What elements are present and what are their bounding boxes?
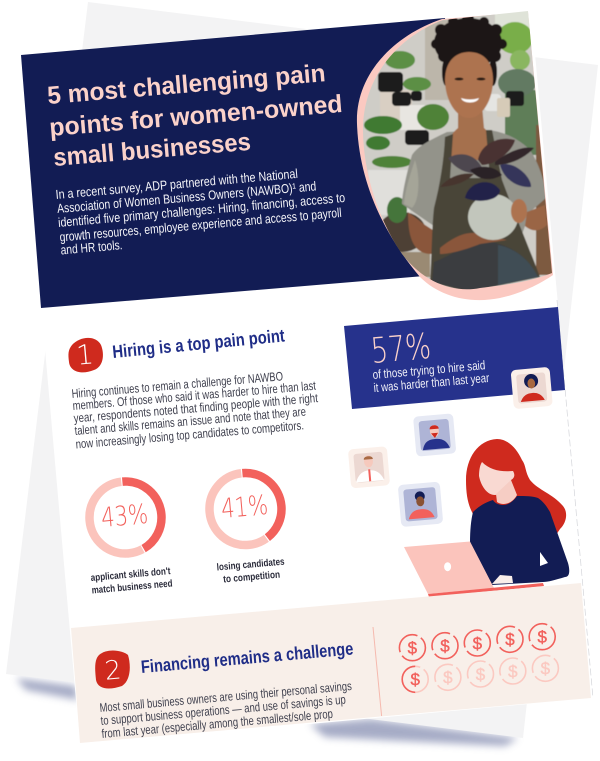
financing body text: Most small business owners are using their personal savings	[99, 679, 352, 715]
icon: dollar signs row 1: $	[473, 634, 483, 653]
photo hanging pots	[378, 72, 524, 145]
donut label 1: match business need	[91, 578, 173, 596]
title: 5 most challenging pain	[46, 59, 327, 110]
photo foliage	[364, 22, 536, 223]
woman hand	[492, 575, 513, 584]
panel: 57% stat box: 57%	[369, 327, 433, 372]
panel: 57% stat box: of those trying to hire said	[372, 358, 486, 382]
panel: section 2 number badge	[95, 650, 130, 688]
photo pot	[468, 194, 518, 240]
illustration: woman at laptop	[404, 439, 569, 597]
hiring body text: Hiring continues to remain a challenge for NAWBO	[71, 369, 284, 401]
laptop logo	[444, 562, 451, 571]
icon: dollar signs row 2: $	[508, 662, 518, 681]
sweater gap	[540, 552, 548, 566]
icon: dollar signs row 1	[408, 628, 547, 658]
woman sweater	[470, 496, 569, 585]
photo right hand	[511, 199, 527, 223]
panel: section 1 number badge	[68, 338, 103, 372]
intro text: Association of Women Business Owners (NAWBO)¹ and	[56, 178, 317, 216]
panel: 57% stat box: it was harder than last year	[373, 371, 490, 395]
photo leaves	[440, 139, 534, 201]
hiring body text: now increasingly losing top candidates to competitors.	[75, 418, 304, 451]
donut label 2: to competition	[223, 570, 281, 585]
photo hair	[431, 13, 507, 86]
heading: financing: Financing remains a challenge	[140, 638, 354, 677]
photo backdrop	[363, 14, 548, 288]
icon: dollar signs row 2: $	[410, 670, 420, 689]
panel: 57% stat box	[344, 307, 565, 409]
financing body text: to support business operations — and use of savings is up	[100, 693, 346, 728]
laptop	[404, 542, 494, 594]
icon: dollar signs row 1: $	[537, 628, 547, 646]
hiring body text: year, respondents noted that finding people with the right	[73, 391, 319, 425]
icon: avatar red hair	[413, 413, 456, 457]
icon: coins row 2	[402, 655, 558, 692]
icon: half-filled coin arc	[402, 666, 415, 692]
donut chart: 41%	[206, 470, 285, 548]
divider line	[373, 627, 382, 716]
financing body text: from last year (especially among the smallest/sole prop	[101, 707, 333, 741]
photo face	[445, 52, 493, 118]
back sheet shadows	[16, 678, 518, 746]
pink blob behind photo	[357, 12, 553, 300]
intro text: identified five primary challenges: Hiring, financing, access to	[57, 190, 346, 230]
icon: avatar top right	[511, 367, 553, 409]
photo arm foreground	[440, 233, 507, 254]
donut label 1	[90, 566, 173, 596]
icon: dollar signs row 2: $	[541, 659, 551, 678]
heading: hiring: Hiring is a top pain point	[111, 325, 286, 362]
panel: header background	[21, 18, 472, 308]
intro text: growth resources, employee experience and access to payroll	[59, 205, 342, 244]
icon: dollar signs row 1: $	[505, 630, 515, 649]
intro text: and HR tools.	[60, 237, 123, 257]
icon: coins row 1	[399, 624, 555, 661]
woman neck	[496, 480, 517, 504]
title: points for women-owned	[48, 90, 344, 142]
intro text	[55, 166, 346, 257]
woman face	[479, 462, 514, 495]
panel: section 1 number badge: 1	[75, 339, 95, 372]
intro text: In a recent survey, ADP partnered with the National	[55, 166, 298, 202]
hiring body text: talent and skills remains an issue and note that they are	[74, 405, 306, 438]
icon: avatar tie	[348, 446, 390, 488]
donut label 2: losing candidates	[216, 557, 285, 573]
photo skin neck and chest	[451, 110, 488, 160]
donut chart: 41%: 41%	[220, 490, 269, 525]
woman hair	[466, 439, 566, 535]
hiring body text: members. Of those who said it was harder to hire than last	[72, 379, 317, 413]
hiring body text	[71, 369, 319, 451]
icon: avatar coral shirt	[398, 482, 443, 527]
title	[46, 59, 344, 172]
financing body text	[100, 682, 352, 738]
photo white pot and tag	[484, 94, 501, 111]
photo apron	[430, 130, 540, 292]
donut label 2	[216, 557, 285, 585]
photo: woman holding a potted plant	[363, 11, 552, 290]
icon: dollar signs row 1: $	[408, 638, 418, 658]
panel: financing band	[71, 583, 591, 743]
photo left arm	[408, 212, 434, 254]
icon group: dollar coins	[399, 624, 558, 692]
icon: dollar signs row 2: $	[443, 668, 453, 687]
title: small businesses	[52, 128, 252, 172]
donut chart: 43%: 43%	[100, 499, 149, 534]
photo shirt	[402, 130, 546, 240]
panel: section 2 number badge: 2	[104, 655, 123, 687]
icon: dollar signs row 1: $	[440, 636, 450, 656]
donut label 1: applicant skills don't	[90, 566, 171, 584]
laptop base	[428, 583, 544, 597]
icon: dollar signs row 2: $	[476, 665, 486, 684]
icon: dollar signs row 2	[410, 659, 551, 689]
donut chart: 43%	[86, 478, 165, 557]
